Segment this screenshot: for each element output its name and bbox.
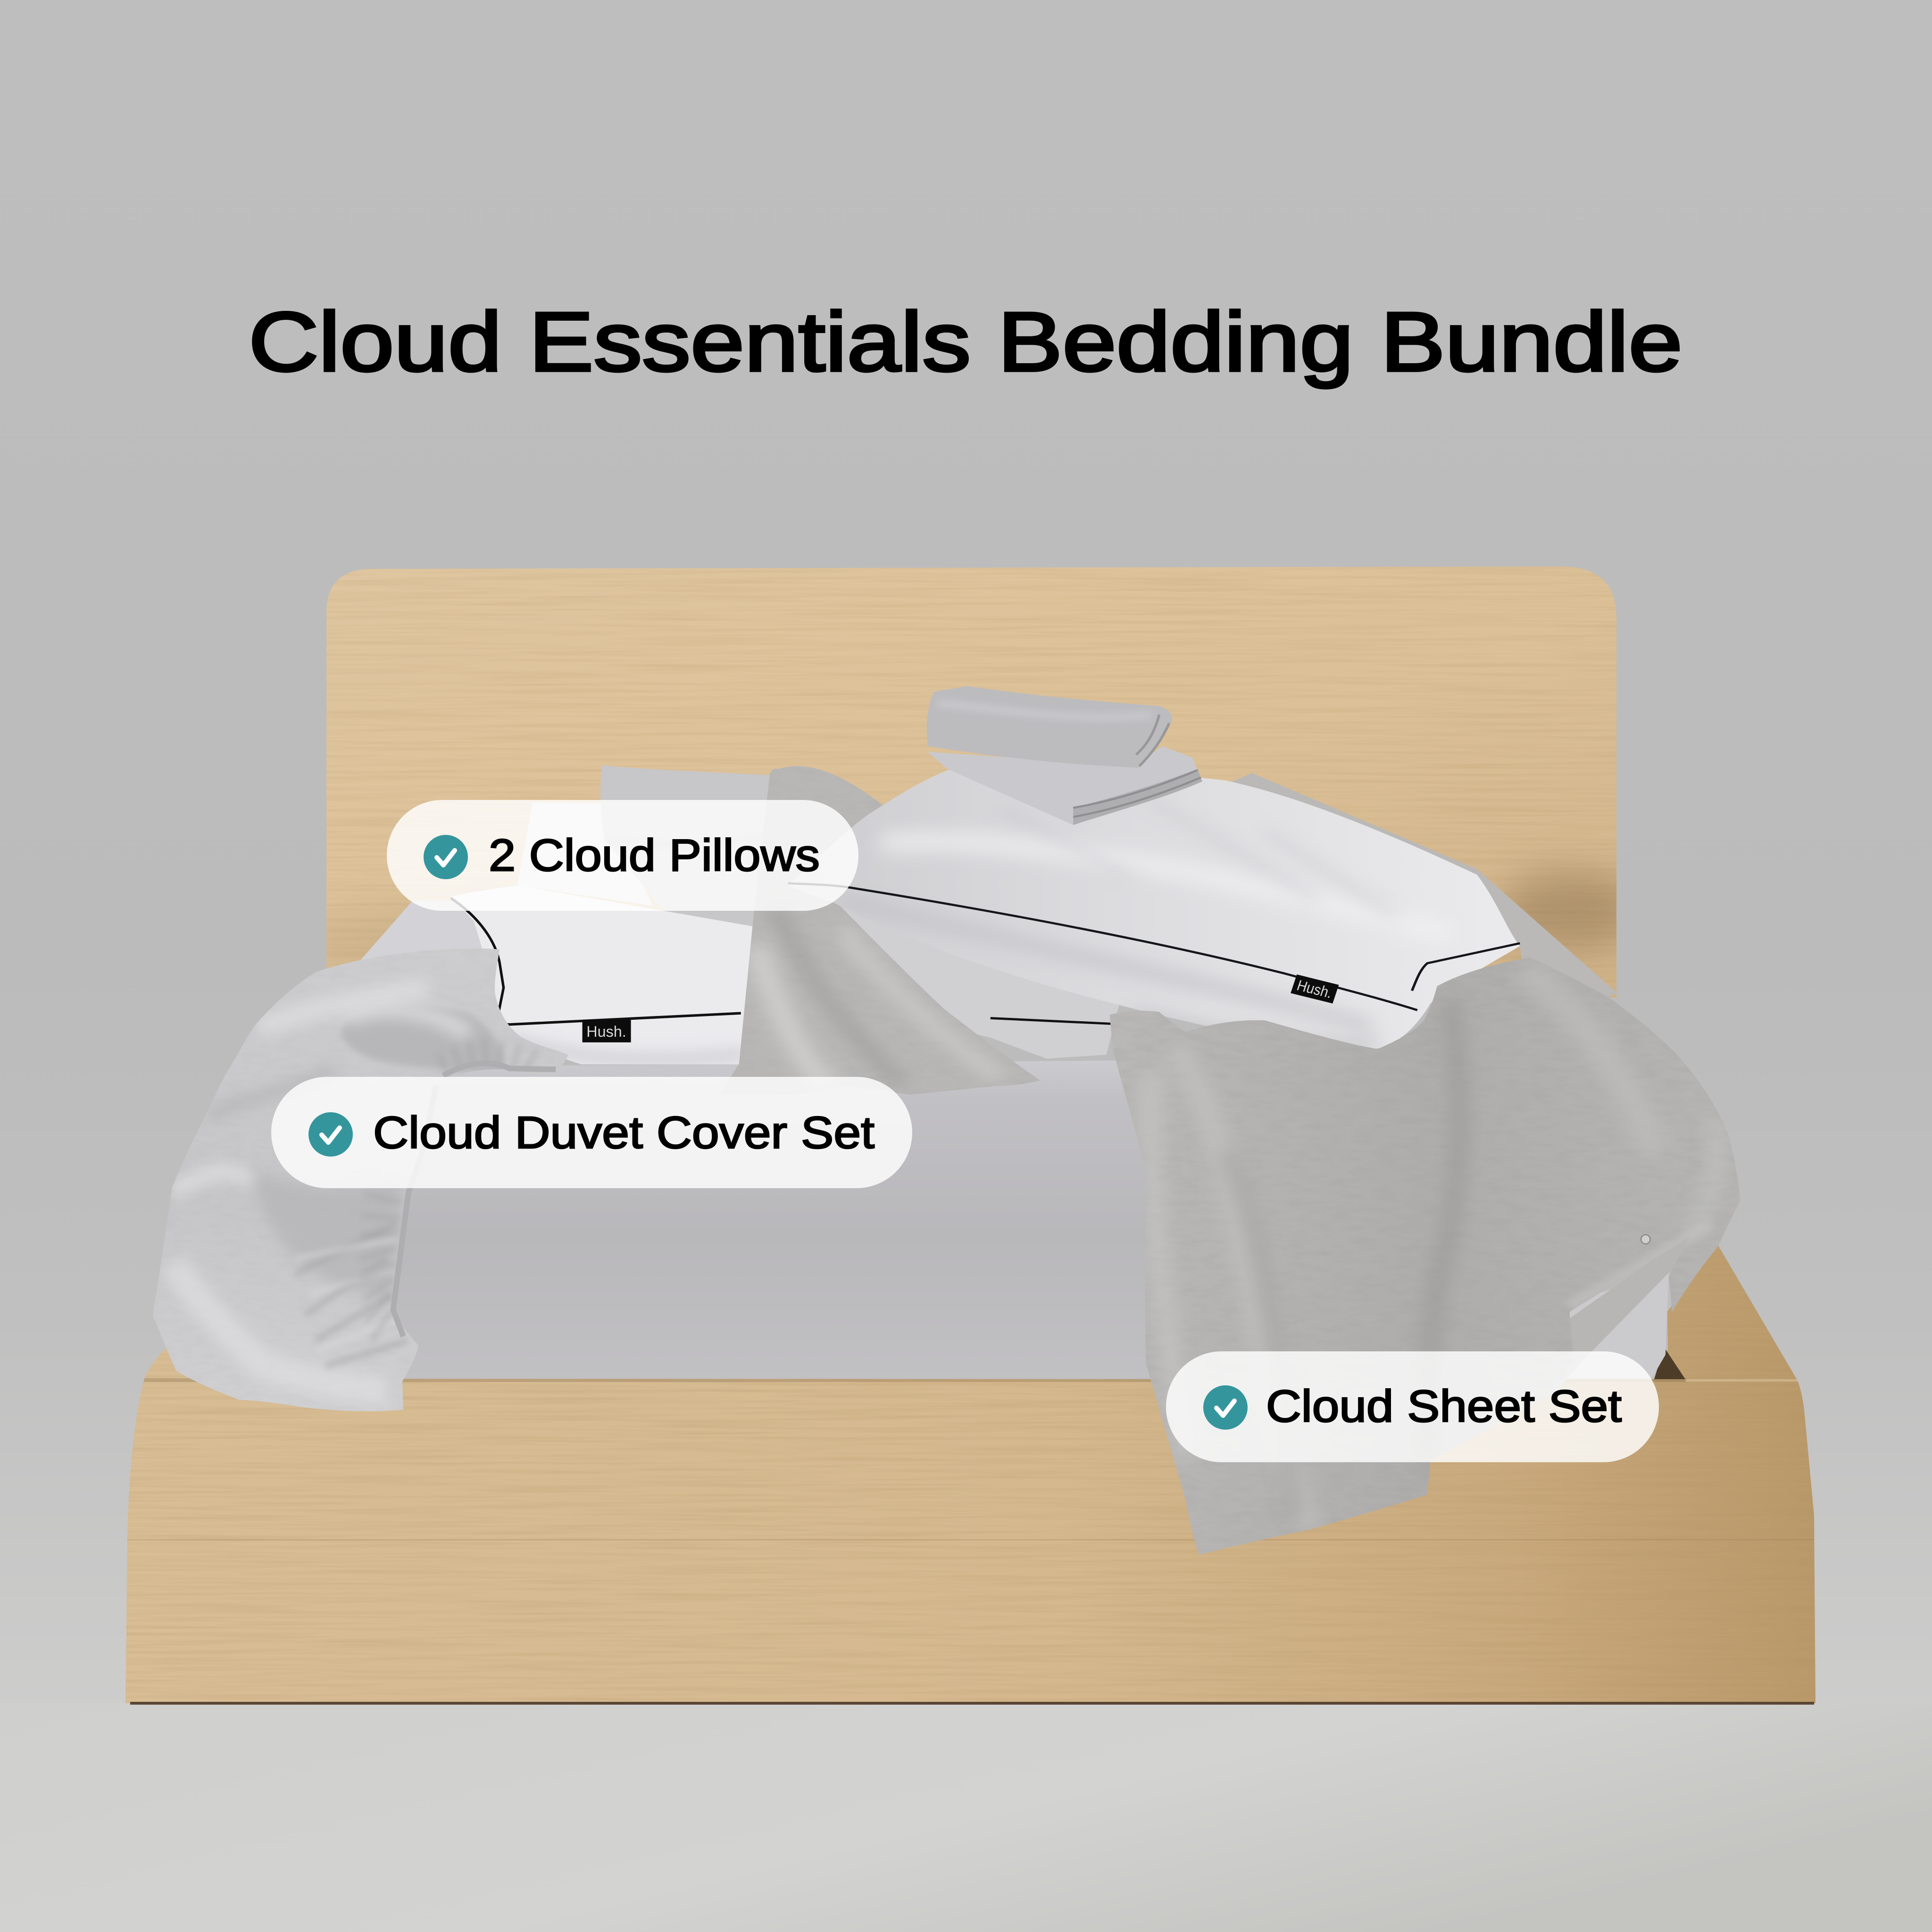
left bedding group: [142, 765, 801, 1422]
left pillow piping: [451, 898, 741, 1024]
left pillow right end under main pillow: [841, 906, 1119, 1059]
check icon: [424, 835, 468, 879]
left pillow: [451, 885, 753, 1065]
back mattress top: [359, 901, 505, 988]
floor: [0, 1704, 1932, 1932]
label: Cloud Sheet Set: Cloud Sheet Set: [1266, 1381, 1622, 1432]
check icon: [1203, 1385, 1248, 1430]
main pillow piping: [788, 883, 1520, 1010]
duvet button: [1641, 1235, 1650, 1244]
label: 2 Cloud Pillows: 2 Cloud Pillows: [489, 830, 820, 881]
duvet flap behind main pillow: [1229, 773, 1617, 1009]
front duvet cover drape: [1106, 952, 1741, 1557]
folded pillowcase behind pillow: [600, 765, 801, 936]
folded sheets on main pillow: [927, 686, 1202, 825]
label: Cloud Duvet Cover Set: [271, 1077, 912, 1188]
label: 2 Cloud Pillows: [387, 800, 858, 911]
duvet hem strip: [1546, 1235, 1700, 1392]
mattress: [396, 1060, 1668, 1379]
right bedding group: [716, 686, 1741, 1557]
fitted sheet elastic: [393, 1063, 556, 1336]
check icon: [308, 1112, 353, 1157]
main pillow tag: Hush.: [1295, 977, 1334, 1001]
main pillow: [788, 764, 1520, 1049]
title: Cloud Essentials Bedding Bundle: [249, 295, 1682, 389]
fitted sheet: [142, 936, 581, 1422]
center drape sheet: [716, 758, 1047, 1100]
left pillow back: [517, 802, 653, 906]
label: Cloud Duvet Cover Set: Cloud Duvet Cover Set: [373, 1108, 874, 1158]
base bottom edge: [130, 1702, 1814, 1705]
label: Cloud Sheet Set: [1166, 1351, 1659, 1462]
slot between mattress and base: [1654, 1347, 1685, 1379]
wooden headboard: [297, 566, 1641, 998]
wooden bed base: [125, 1245, 1816, 1704]
left pillow tag: Hush.: [586, 1023, 626, 1040]
exposed mattress corner under duvet: [1556, 1272, 1669, 1378]
left pillow tag: [583, 1020, 631, 1042]
